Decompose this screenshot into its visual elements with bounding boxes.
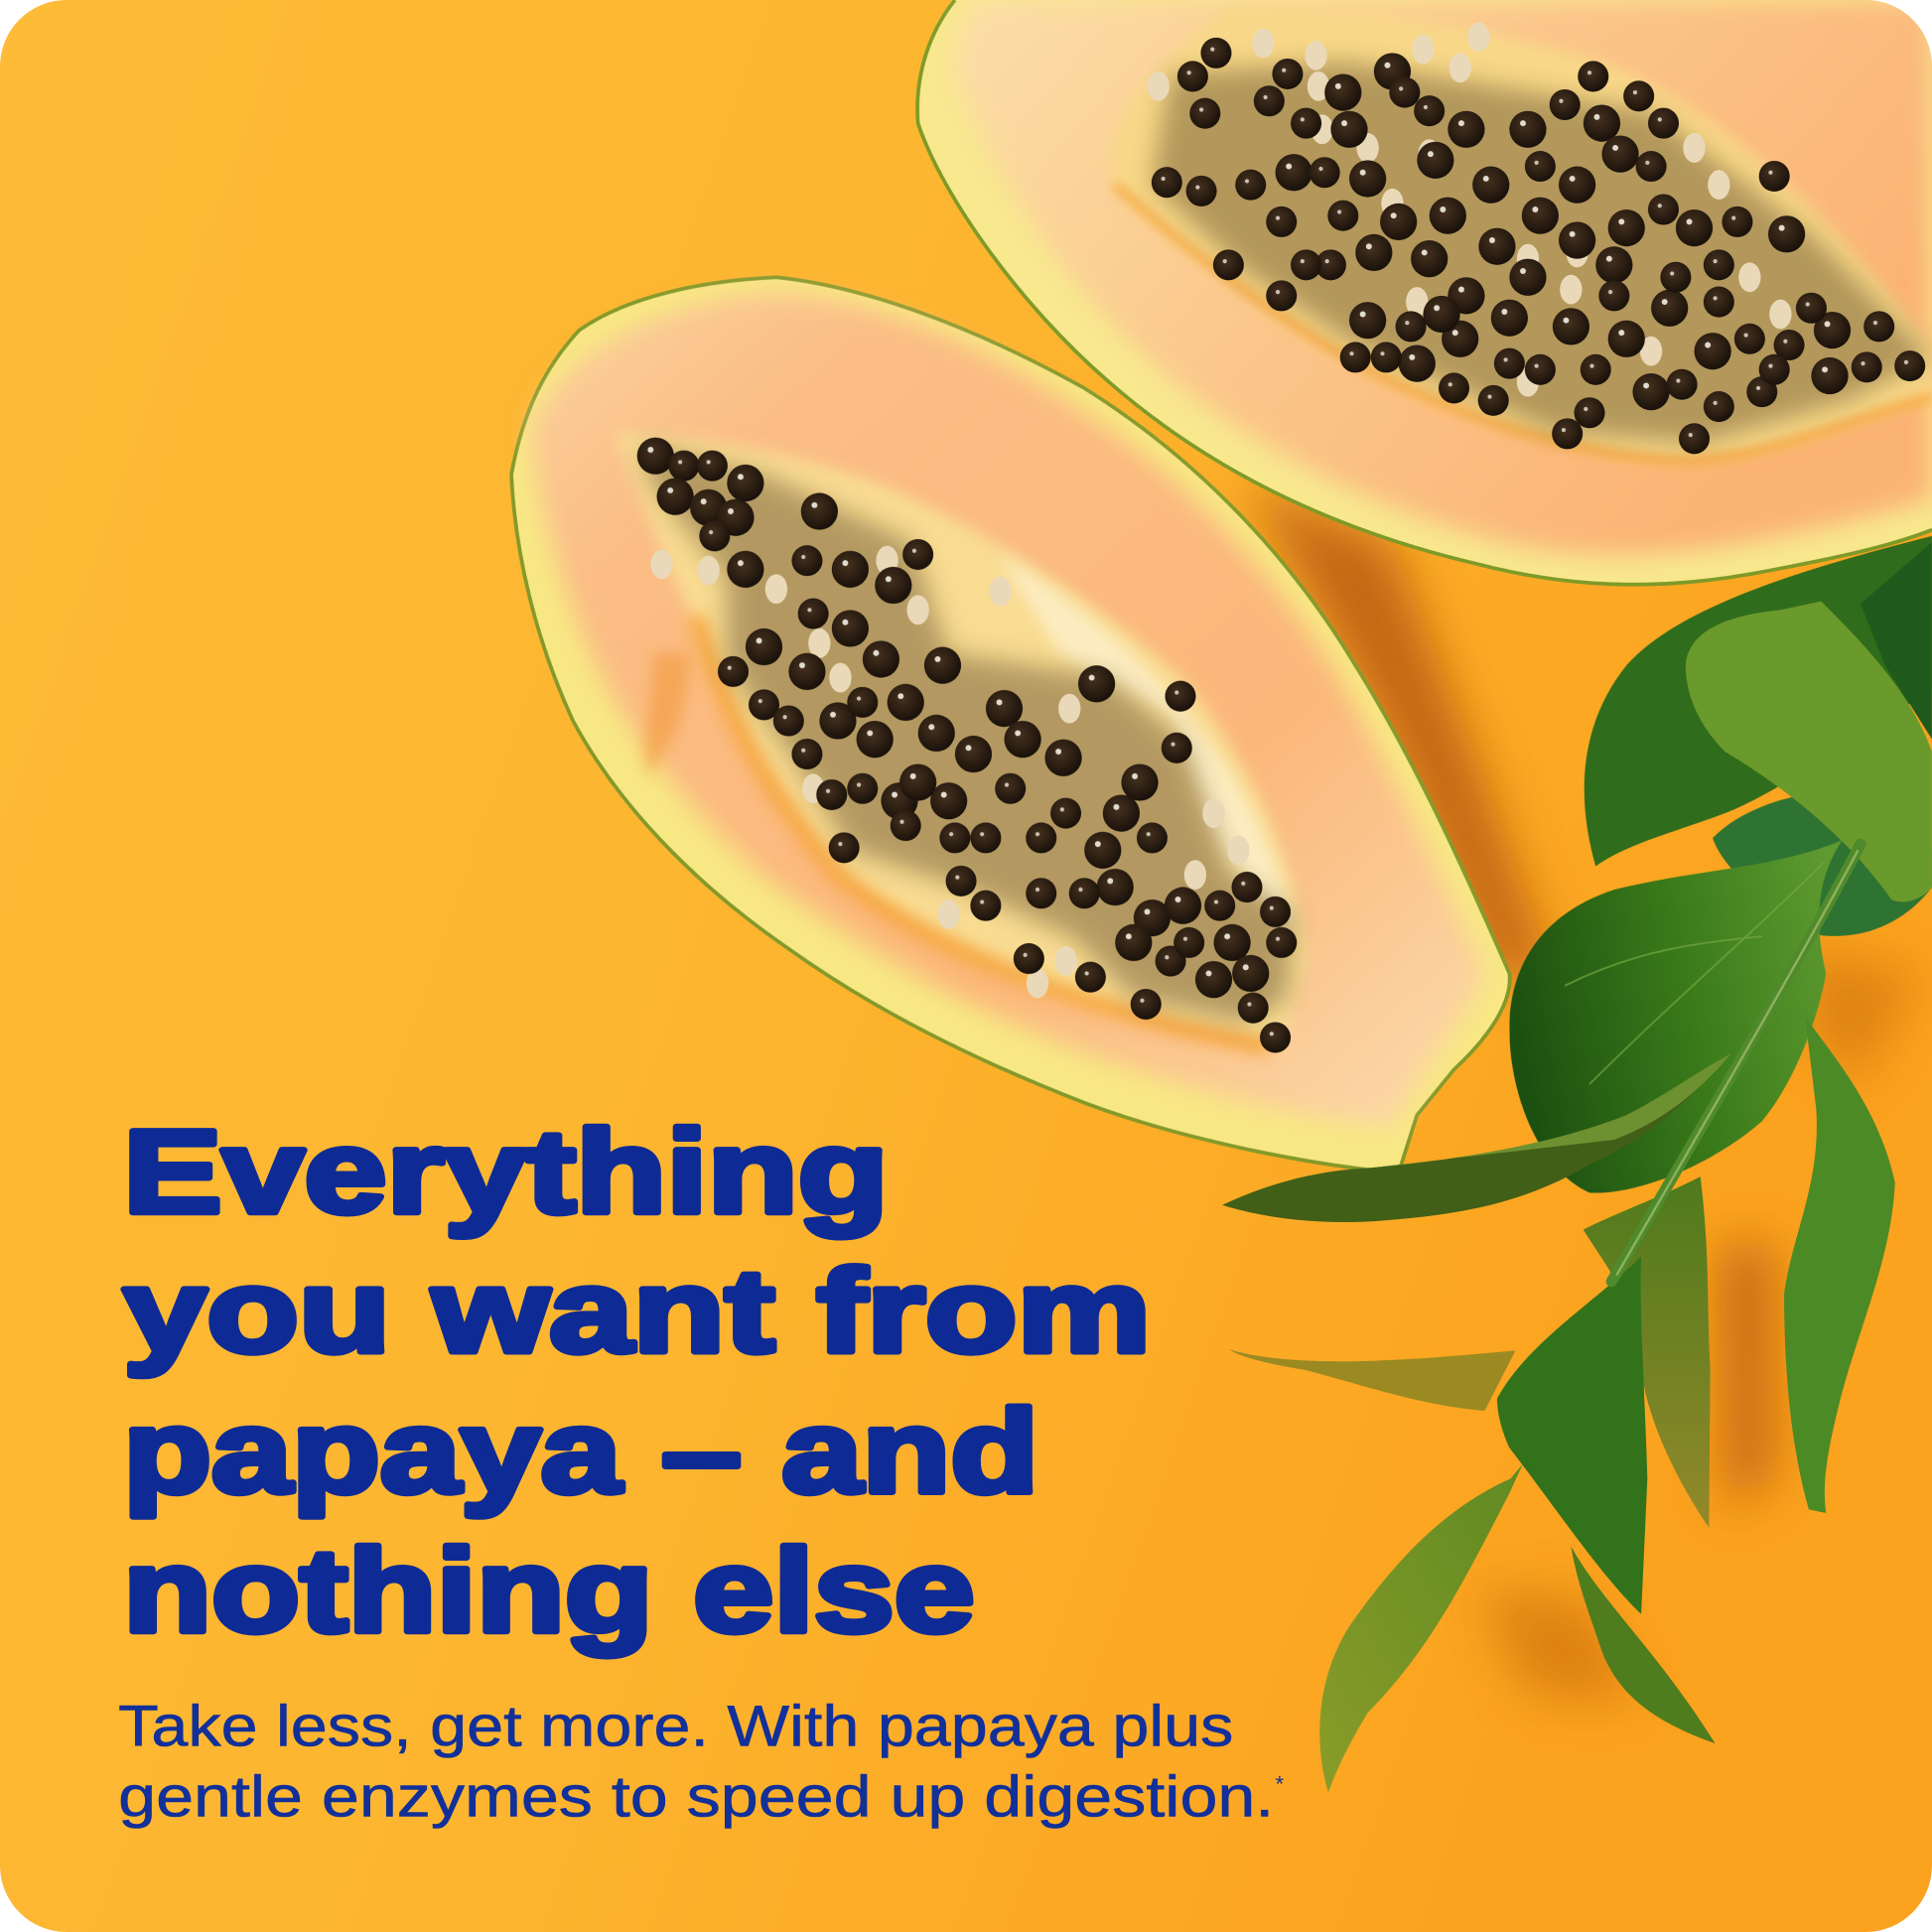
main stem: [1611, 844, 1861, 1282]
skin and rim: [511, 277, 1510, 1173]
leaf: dark far right: [1861, 542, 1932, 740]
leaf: bottom pointed: [1571, 1547, 1716, 1743]
subtitle: gentle enzymes to speed up digestion.: [118, 1764, 1274, 1829]
title: you want from: [123, 1245, 1151, 1377]
subtitle: *: [1276, 1772, 1285, 1797]
dark seed mass: [1152, 62, 1932, 444]
cast shadows: [1244, 481, 1922, 1701]
subtitle: [118, 1695, 1285, 1829]
peach flesh: [955, 0, 1932, 554]
leaf: dark lower: [1497, 1257, 1647, 1614]
seed cavity: [1111, 6, 1932, 461]
seed cavity: [617, 431, 1309, 1047]
leaf: folded middle: [1584, 1176, 1711, 1528]
dark seed mass: [640, 444, 1294, 1023]
leafy branch: [1222, 536, 1932, 1793]
leaf: back right: [1713, 788, 1932, 936]
leaf: lower left: [1319, 1463, 1523, 1793]
skin and rim: [917, 0, 1932, 585]
papaya half: centre left: [511, 277, 1510, 1173]
title: papaya – and: [123, 1386, 1038, 1518]
orange membrane: [696, 617, 1269, 1047]
pale seeds: [1147, 22, 1792, 397]
skin edge: [917, 0, 1932, 585]
black seeds: [637, 438, 1297, 1052]
title: [123, 1106, 1151, 1657]
leaf: large centre: [1509, 840, 1842, 1192]
subtitle: Take less, get more. With papaya plus: [118, 1695, 1233, 1759]
pale seeds: [650, 546, 1249, 998]
black seeds: [1152, 38, 1925, 454]
leaf: long horizontal: [1222, 1053, 1731, 1222]
flesh blush: [645, 653, 690, 776]
orange membrane: [1115, 185, 1932, 461]
leaf: lower right: [1784, 1017, 1895, 1513]
leaf: horizontal highlight: [1368, 1053, 1731, 1169]
title: nothing else: [123, 1525, 975, 1657]
cream pulp: [998, 554, 1294, 936]
peach flesh: [532, 293, 1484, 1128]
leaf vein: large centre: [1565, 863, 1824, 1084]
title: Everything: [123, 1106, 889, 1238]
leaf: thin amber: [1228, 1349, 1516, 1411]
leaf: dark upper: [1585, 536, 1932, 866]
stem highlight: [1616, 850, 1859, 1276]
leaf: light folded: [1686, 602, 1932, 901]
papaya half: upper right: [917, 0, 1932, 585]
